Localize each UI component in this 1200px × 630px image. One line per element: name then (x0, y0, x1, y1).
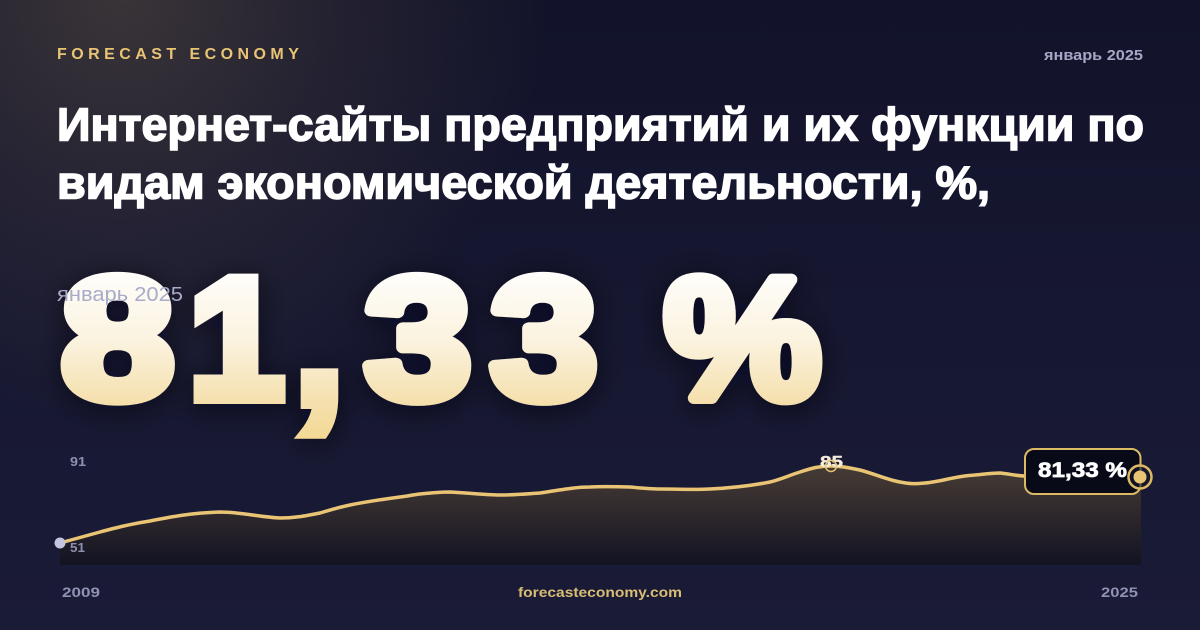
big value: % (664, 242, 821, 435)
peak label: 85 (820, 454, 843, 471)
big value: 3 (364, 243, 472, 435)
data line (60, 466, 1141, 543)
brand label: FORECAST ECONOMY (57, 46, 303, 63)
peak marker (826, 460, 836, 472)
chart area (60, 466, 1141, 565)
date top right: январь 2025 (1044, 47, 1143, 64)
axis max label: 91 (70, 454, 86, 469)
title: видам экономической деятельности, %, (57, 156, 990, 208)
big value: 1 (189, 243, 284, 435)
big value: 8 (61, 243, 174, 435)
title: Интернет-сайты предприятий и их функции по (57, 98, 1144, 150)
title (57, 98, 1144, 208)
value callout (1025, 449, 1140, 494)
date overlay: январь 2025 (57, 284, 183, 306)
big value (61, 230, 821, 444)
axis min label: 51 (70, 540, 85, 555)
end year: 2025 (1101, 584, 1138, 600)
big value: , (294, 230, 345, 444)
end marker (1128, 466, 1152, 488)
start year: 2009 (62, 584, 100, 600)
value callout: 81,33 % (1038, 459, 1127, 482)
big value: 3 (490, 243, 598, 435)
start point (54, 538, 66, 548)
line chart (54, 449, 1152, 565)
website: forecasteconomy.com (518, 584, 682, 600)
